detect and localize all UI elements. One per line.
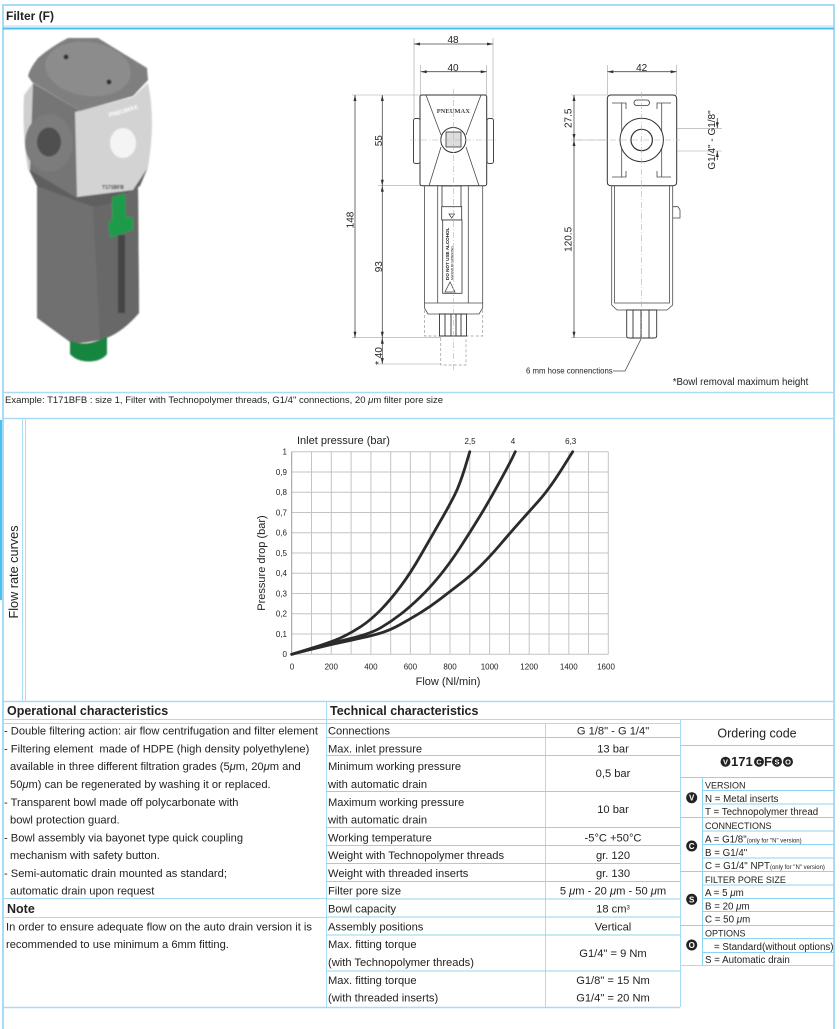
option rows: A = 5 μm — [705, 888, 744, 899]
curve 2,5 bar — [292, 452, 470, 654]
option rows: T = Technopolymer thread — [705, 807, 818, 818]
code string: V — [723, 758, 728, 766]
x axis labels — [290, 662, 615, 672]
pore size badge: S — [689, 895, 695, 904]
x axis labels: 800 — [443, 662, 457, 672]
curve labels — [464, 437, 577, 446]
parameter names: with automatic drain — [327, 814, 427, 826]
panel: technical characteristics — [326, 704, 680, 1004]
option rows — [705, 780, 834, 966]
code string: C — [756, 758, 762, 766]
option rows: C = 50 μm — [705, 914, 750, 926]
option rows: OPTIONS — [705, 928, 746, 938]
parameter values: 18 cm — [596, 904, 626, 916]
list: - Double filtering action: air flow centrifugation and filter element — [4, 726, 319, 738]
option rows: VERSION — [705, 780, 746, 790]
pore size badge — [686, 894, 697, 905]
y axis labels: 0,5 — [276, 549, 288, 558]
list: mechanism with safety button. — [10, 850, 160, 862]
flow rate chart — [256, 435, 615, 688]
connections badge — [686, 840, 697, 852]
panel: operational characteristics — [4, 704, 319, 898]
y axis labels: 0,4 — [276, 569, 288, 578]
parameter values: gr. 120 — [596, 850, 630, 862]
option rows: C = G1/4" NPT(only for "N" version) — [705, 861, 825, 872]
x axis labels: 600 — [404, 662, 418, 672]
dimension labels side: 42 — [636, 63, 648, 74]
parameter names: Filter pore size — [328, 886, 401, 898]
parameter values: G1/4" = 20 Nm — [576, 992, 650, 1004]
dimension arrows side — [572, 70, 719, 338]
parameter names: Max. fitting torque — [328, 939, 417, 951]
hose connection callout: 6 mm hose connenctions — [526, 366, 613, 376]
parameter names: Bowl capacity — [328, 904, 397, 916]
option rows: CONNECTIONS — [705, 821, 772, 831]
section label: flow rate curves: Flow rate curves — [7, 525, 21, 619]
note text — [6, 922, 312, 951]
dimension labels side — [564, 63, 718, 252]
option rows: B = 20 μm — [705, 902, 750, 912]
parameter values: 0,5 bar — [596, 768, 631, 780]
y axis labels: 0,7 — [276, 508, 288, 518]
options badge: O — [689, 941, 695, 950]
parameter names: Weight with Technopolymer threads — [328, 850, 505, 862]
x axis labels: 400 — [364, 662, 378, 672]
note text: recommended to use minimum a 6mm fitting. — [6, 939, 229, 951]
option rows: FILTER PORE SIZE — [705, 875, 786, 885]
list: 50μm) can be regenerated by washing it or replaced. — [10, 779, 271, 791]
dimension labels front: 148 — [346, 211, 356, 228]
parameter names: Working temperature — [328, 832, 432, 844]
parameter names: Weight with threaded inserts — [328, 868, 469, 880]
filter body front: PNEUMAX — [437, 108, 470, 115]
curve 6,3 bar — [292, 452, 573, 654]
parameter values: gr. 130 — [596, 868, 630, 880]
x axis title: Flow (Nl/min) — [416, 676, 480, 688]
note heading: Note — [7, 902, 35, 916]
list — [4, 726, 319, 898]
parameter names: (with threaded inserts) — [328, 992, 439, 1004]
filter body front: DO NOT USE ALCOHOL — [445, 227, 450, 280]
list: automatic drain upon request — [10, 886, 155, 898]
ordering heading: Ordering code — [717, 726, 797, 740]
parameter values: G1/4" = 9 Nm — [579, 948, 647, 960]
x axis labels: 1400 — [560, 662, 578, 672]
dimension labels front — [346, 35, 459, 365]
dimension labels front: 55 — [374, 135, 385, 146]
curve labels: 4 — [511, 437, 516, 446]
x axis labels: 1200 — [520, 662, 539, 672]
parameter names: Minimum working pressure — [328, 761, 461, 773]
option rows: B = G1/4" — [705, 848, 748, 859]
parameter names: (with Technopolymer threads) — [328, 957, 474, 969]
note divider — [3, 898, 326, 918]
parameter values: 13 bar — [597, 744, 629, 756]
parameter values — [560, 726, 666, 1004]
y axis labels: 1 — [283, 448, 288, 456]
parameter names: Maximum working pressure — [328, 797, 464, 809]
x axis labels: 0 — [290, 662, 295, 672]
side view drawing — [526, 63, 722, 376]
parameter names: with automatic drain — [327, 779, 427, 791]
dimension arrows front — [354, 42, 493, 364]
list: - Transparent bowl made off polycarbonate with — [4, 797, 238, 809]
y axis labels: 0,1 — [276, 630, 288, 639]
y axis title: Pressure drop (bar) — [256, 515, 268, 611]
parameter values: 3 — [626, 906, 630, 912]
parameter values: G 1/8" - G 1/4" — [577, 726, 649, 738]
parameter names: Max. fitting torque — [328, 975, 417, 987]
panel: note — [6, 902, 312, 951]
dimension labels side: 120.5 — [564, 226, 574, 252]
y axis labels: 0,6 — [276, 528, 288, 538]
parameter values: 10 bar — [597, 804, 629, 816]
dimension labels front: * 40 — [374, 347, 385, 365]
filter body side — [577, 92, 680, 338]
code string — [720, 754, 793, 769]
dimension labels side: 27.5 — [564, 108, 574, 128]
parameter values: 5 μm - 20 μm - 50 μm — [560, 886, 666, 898]
connections badge: C — [689, 842, 695, 851]
list: bowl protection guard. — [10, 814, 120, 826]
parameter names — [327, 726, 505, 1004]
product photo: T171BFB — [102, 185, 124, 191]
options badge — [686, 940, 697, 950]
heading: Operational characteristics — [7, 704, 168, 718]
parameter names: Connections — [328, 726, 390, 738]
front view drawing — [346, 35, 497, 370]
option rows: S = Automatic drain — [705, 955, 790, 966]
parameter values: Vertical — [595, 922, 631, 934]
x axis labels: 1600 — [597, 662, 615, 672]
dimension labels front: 93 — [374, 261, 385, 272]
code string: S — [774, 758, 780, 766]
legend title: Inlet pressure (bar) — [297, 435, 390, 447]
version badge: V — [689, 794, 695, 803]
x axis labels: 200 — [325, 662, 339, 672]
bowl removal note: *Bowl removal maximum height — [673, 377, 809, 388]
dimension labels front: 40 — [447, 63, 459, 74]
title: Filter (F) — [6, 9, 54, 23]
curve labels: 2,5 — [464, 437, 476, 446]
dimension labels side: G1/4" - G1/8" — [707, 110, 718, 170]
parameter values: -5°C +50°C — [585, 832, 641, 844]
list: available in three different filtration grades (5μm, 20μm and — [10, 761, 301, 773]
product photo: PNEUMAX — [108, 105, 139, 119]
code string: O — [785, 758, 791, 766]
parameter names: Assembly positions — [328, 922, 424, 934]
y axis labels: 0,2 — [276, 610, 288, 618]
y axis labels: 0 — [283, 650, 288, 659]
y axis labels — [276, 448, 288, 659]
tech heading: Technical characteristics — [330, 704, 479, 718]
y axis labels: 0,3 — [276, 590, 288, 598]
code string: 171 — [731, 754, 753, 769]
panel: ordering code — [680, 726, 834, 966]
y axis labels: 0,8 — [276, 488, 288, 497]
example caption: Example: T171BFB : size 1, Filter with Technopolymer threads, G1/4" connections, 20 μm filter pore size — [5, 395, 443, 406]
code string: F — [764, 754, 772, 769]
option rows: A = G1/8"(only for "N" version) — [705, 834, 802, 846]
curve 4 bar — [292, 452, 515, 654]
product photo — [24, 36, 152, 362]
note text: In order to ensure adequate flow on the auto drain version it is — [6, 922, 312, 934]
x axis labels: 1000 — [481, 662, 499, 672]
list: - Filtering element made of HDPE (high density polyethylene) — [4, 744, 310, 756]
version badge — [686, 792, 697, 803]
hose connection callout — [526, 339, 641, 376]
parameter names: Max. inlet pressure — [328, 744, 422, 756]
option rows: N = Metal inserts — [705, 794, 779, 805]
filter body front: MAXIMUM WORKING — [450, 246, 454, 280]
filter body front — [410, 89, 497, 370]
option rows: = Standard(without options) — [714, 942, 834, 953]
y axis labels: 0,9 — [276, 468, 288, 477]
parameter values: G1/8" = 15 Nm — [576, 975, 650, 987]
list: - Semi-automatic drain mounted as standard; — [4, 868, 227, 880]
dimension labels front: 48 — [447, 35, 459, 46]
curve labels: 6,3 — [565, 437, 577, 446]
list: - Bowl assembly via bayonet type quick coupling — [4, 832, 243, 844]
